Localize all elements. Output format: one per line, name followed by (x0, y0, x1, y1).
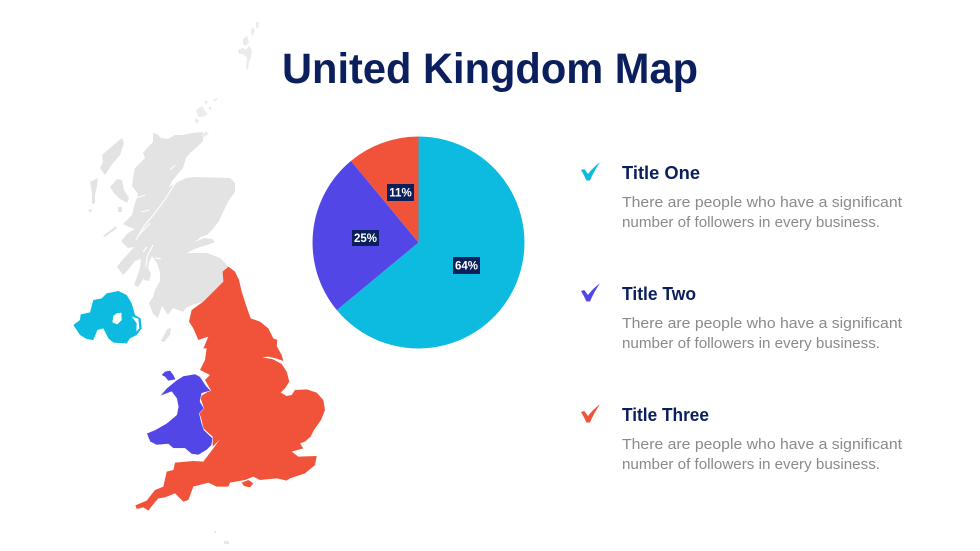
sea lochs (136, 165, 176, 267)
region: Wales (147, 371, 213, 455)
label: 11%: 11% (389, 188, 412, 200)
label: 11% (387, 184, 414, 201)
text block: number of followers in every business. (622, 214, 880, 231)
slice: 11% (351, 136, 418, 242)
heading: Title Two (622, 284, 696, 304)
item: Title One (581, 162, 903, 231)
region: England (135, 267, 325, 511)
heading: Title One (622, 163, 700, 183)
icon: check (581, 162, 600, 180)
label: 64% (453, 257, 480, 274)
slice: 64% (337, 136, 524, 348)
region: Scotland (88, 22, 259, 342)
text block: number of followers in every business. (622, 335, 880, 352)
slice: 25% (313, 161, 418, 310)
icon: check (581, 283, 600, 302)
text block: There are people who have a significant (622, 436, 903, 453)
label: 25%: 25% (354, 233, 377, 245)
icon: check (581, 404, 600, 422)
label: 64%: 64% (455, 260, 478, 272)
heading: Title Three (622, 405, 709, 425)
item: Title Three (581, 404, 903, 473)
text block: There are people who have a significant (622, 194, 903, 211)
islands: Orkney (195, 98, 218, 137)
text block (622, 315, 903, 352)
text block (622, 436, 903, 473)
text block: number of followers in every business. (622, 456, 880, 473)
text block (622, 194, 903, 231)
islands: Shetland (238, 22, 259, 70)
islands: Scilly (214, 531, 229, 544)
pie chart (313, 136, 524, 348)
text block: There are people who have a significant (622, 315, 903, 332)
title: United Kingdom Map (282, 45, 698, 93)
region: Northern Ireland (73, 291, 142, 343)
label: 25% (352, 230, 379, 246)
item: Title Two (581, 283, 903, 352)
map of the United Kingdom (73, 22, 325, 544)
